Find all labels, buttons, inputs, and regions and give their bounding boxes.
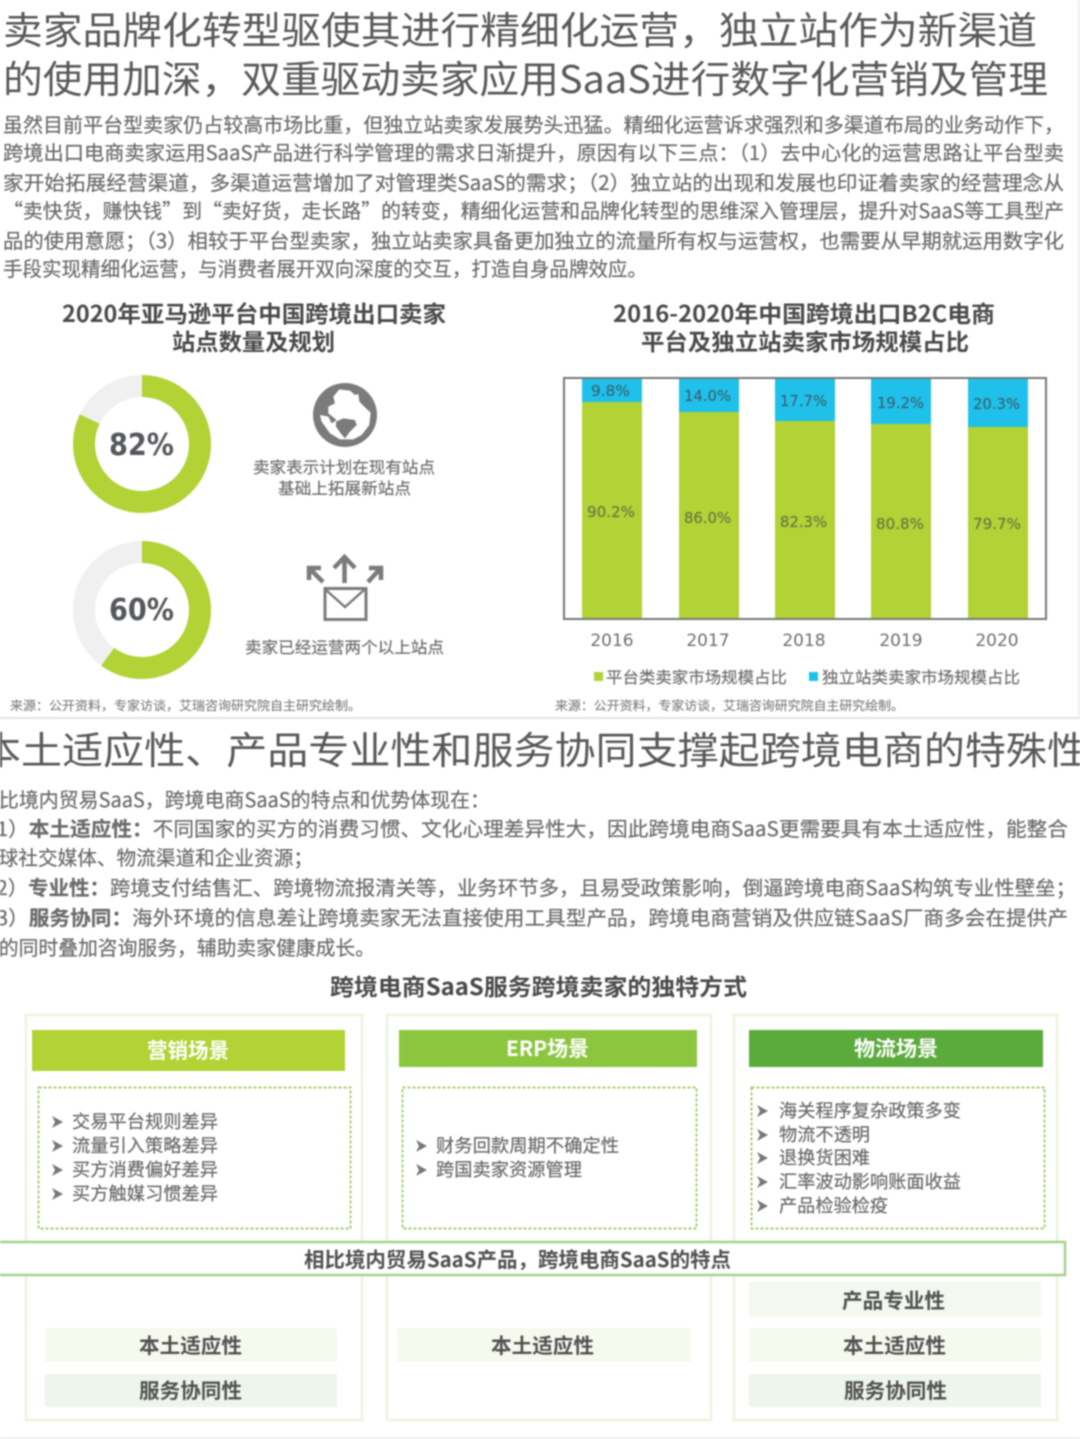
chart: donut 82%: 82% — [109, 428, 174, 463]
marketing list: 交易平台规则差异 — [72, 1108, 218, 1134]
legend: 平台类卖家市场规模占比 — [606, 664, 787, 688]
logistics list: 海关程序复杂政策多变 — [779, 1097, 961, 1123]
text block: bottom section intro — [0, 784, 1076, 961]
marketing header: 营销场景 — [147, 1035, 229, 1065]
chart: stacked bars — [564, 378, 1046, 651]
text block: top section intro: “卖快货，赚快钱”到“卖好货，走长路”的转变，精细化运营和品牌化转型的思维深入管理层，提升对SaaS等工具型产 — [3, 195, 1064, 224]
marketing chip: localization — [45, 1328, 337, 1362]
chart: donut 60% — [84, 552, 200, 668]
marketing list: 买方触媒习惯差异 — [72, 1180, 218, 1206]
chart: stacked bars: 2019 — [879, 631, 923, 651]
heading: market share chart — [613, 295, 995, 357]
marketing header — [32, 1030, 345, 1071]
text block: donut 82% caption: 基础上拓展新站点 — [278, 475, 411, 499]
marketing chip: service synergy — [45, 1374, 337, 1407]
chart: stacked bars: 9.8% — [591, 382, 630, 400]
text block: top section intro: 品的使用意愿；（3）相较于平台型卖家，独立站卖家具备更加独立的流量所有权与运营权，也需要从早期就运用数字化 — [3, 225, 1064, 254]
logistics list: 退换货困难 — [779, 1144, 870, 1170]
panel: logistics scenario — [734, 1015, 1057, 1420]
text block: top section intro — [3, 109, 1064, 282]
heading: unique service methods: 跨境电商SaaS服务跨境卖家的独特方式 — [330, 968, 747, 1002]
chart: stacked bars: 2017 — [686, 631, 730, 651]
text block: top section intro: 虽然目前平台型卖家仍占较高市场比重，但独立站卖家发展势头迅猛。精细化运营诉求强烈和多渠道布局的业务动作下， — [3, 109, 1064, 138]
ERP chip: localization — [397, 1328, 691, 1362]
title: top section: 的使用加深，双重驱动卖家应用SaaS进行数字化营销及管理 — [3, 49, 1048, 104]
text block: bottom section intro: （3）服务协同：海外环境的信息差让跨境卖家无法直接使用工具型产品，跨境电商营销及供应链SaaS厂商多会在提供产 — [0, 902, 1068, 931]
ERP list: 财务回款周期不确定性 — [436, 1132, 619, 1158]
chart: donut 82% — [84, 386, 200, 502]
chart: stacked bars: 19.2% — [877, 394, 924, 412]
logistics list: 汇率波动影响账面收益 — [779, 1168, 961, 1194]
logistics list: 物流不透明 — [779, 1121, 870, 1147]
callout: features band: 相比境内贸易SaaS产品，跨境电商SaaS的特点 — [304, 1243, 731, 1273]
chart: stacked bars: 90.2% — [587, 503, 635, 521]
heading: Amazon sellers chart: 2020年亚马逊平台中国跨境出口卖家 — [62, 295, 446, 329]
marketing list — [52, 1108, 218, 1206]
chart: stacked bars: 2018 — [782, 631, 826, 651]
logistics header: 物流场景 — [854, 1033, 938, 1063]
text block: donut 82% caption — [253, 454, 435, 499]
chart: stacked bars: 86.0% — [684, 509, 731, 527]
legend — [594, 664, 1020, 688]
chart: stacked bars: 20.3% — [973, 395, 1020, 413]
title: top section — [3, 0, 1048, 104]
callout: features band — [0, 1242, 1065, 1275]
ERP list: 跨国卖家资源管理 — [436, 1156, 582, 1182]
title: bottom section: 本土适应性、产品专业性和服务协同支撑起跨境电商的特殊性 — [0, 720, 1080, 775]
text block: donut 82% caption: 卖家表示计划在现有站点 — [253, 454, 435, 478]
heading: market share chart: 平台及独立站卖家市场规模占比 — [641, 323, 969, 357]
logistics chip: product expertise: 产品专业性 — [842, 1284, 945, 1314]
chart: stacked bars: 80.8% — [876, 515, 924, 533]
chart: donut 60%: 60% — [109, 593, 174, 628]
chart: stacked bars: 14.0% — [684, 387, 731, 405]
text block: bottom section intro: （2）专业性：跨境支付结售汇、跨境物流报清关等，业务环节多，且易受政策影响，倒逼跨境电商SaaS构筑专业性壁垒； — [0, 872, 1076, 901]
icon: envelope with arrows — [309, 557, 381, 620]
logistics chip: product expertise — [749, 1282, 1041, 1317]
chart: stacked bars: 82.3% — [780, 513, 827, 531]
logistics chip: service synergy — [749, 1374, 1041, 1407]
marketing chip: localization: 本土适应性 — [139, 1329, 242, 1359]
logistics chip: service synergy: 服务协同性 — [844, 1374, 947, 1404]
icon: globe — [313, 383, 377, 447]
text block: bottom section intro: （1）本土适应性：不同国家的买方的消费习惯、文化心理差异性大，因此跨境电商SaaS更需要具有本土适应性，能整合 — [0, 813, 1068, 842]
text block: top section intro: 跨境出口电商卖家运用SaaS产品进行科学管理的需求日渐提升，原因有以下三点：（1）去中心化的运营思路让平台型卖 — [3, 137, 1064, 166]
logistics chip: localization — [749, 1328, 1041, 1362]
heading: Amazon sellers chart — [62, 295, 446, 357]
chart: stacked bars: 17.7% — [780, 392, 827, 410]
chart: stacked bars: 2016 — [590, 631, 634, 651]
logistics list — [757, 1097, 961, 1218]
logistics chip: localization: 本土适应性 — [843, 1329, 946, 1359]
text block: top section intro: 家开始拓展经营渠道，多渠道运营增加了对管理类SaaS的需求；（2）独立站的出现和发展也印证着卖家的经营理念从 — [3, 167, 1064, 196]
marketing list: 流量引入策略差异 — [72, 1132, 218, 1158]
text block: donut 60% caption: 卖家已经运营两个以上站点 — [245, 634, 444, 658]
chart: stacked bars: 79.7% — [973, 515, 1021, 533]
title: top section: 卖家品牌化转型驱使其进行精细化运营，独立站作为新渠道 — [3, 0, 1037, 55]
ERP chip: localization: 本土适应性 — [491, 1329, 594, 1359]
heading: market share chart: 2016-2020年中国跨境出口B2C电商 — [613, 295, 995, 329]
ERP header: ERP场景 — [506, 1033, 589, 1063]
chart: stacked bars: 2020 — [975, 631, 1019, 651]
text block: right source: 来源：公开资料，专家访谈，艾瑞咨询研究院自主研究绘制。 — [555, 695, 904, 714]
legend: 独立站类卖家市场规模占比 — [822, 664, 1020, 688]
ERP header — [399, 1030, 697, 1067]
logistics header — [749, 1030, 1043, 1067]
text block: top section intro: 手段实现精细化运营，与消费者展开双向深度的交互，打造自身品牌效应。 — [3, 253, 647, 282]
heading: Amazon sellers chart: 站点数量及规划 — [172, 323, 335, 357]
text block: left source: 来源：公开资料，专家访谈，艾瑞咨询研究院自主研究绘制。 — [10, 695, 361, 714]
ERP list — [416, 1132, 619, 1182]
logistics list: 产品检验检疫 — [779, 1192, 888, 1218]
marketing chip: service synergy: 服务协同性 — [139, 1374, 242, 1404]
marketing list: 买方消费偏好差异 — [72, 1156, 218, 1182]
panel: marketing scenario — [26, 1015, 362, 1420]
panel: ERP scenario — [387, 1015, 711, 1420]
